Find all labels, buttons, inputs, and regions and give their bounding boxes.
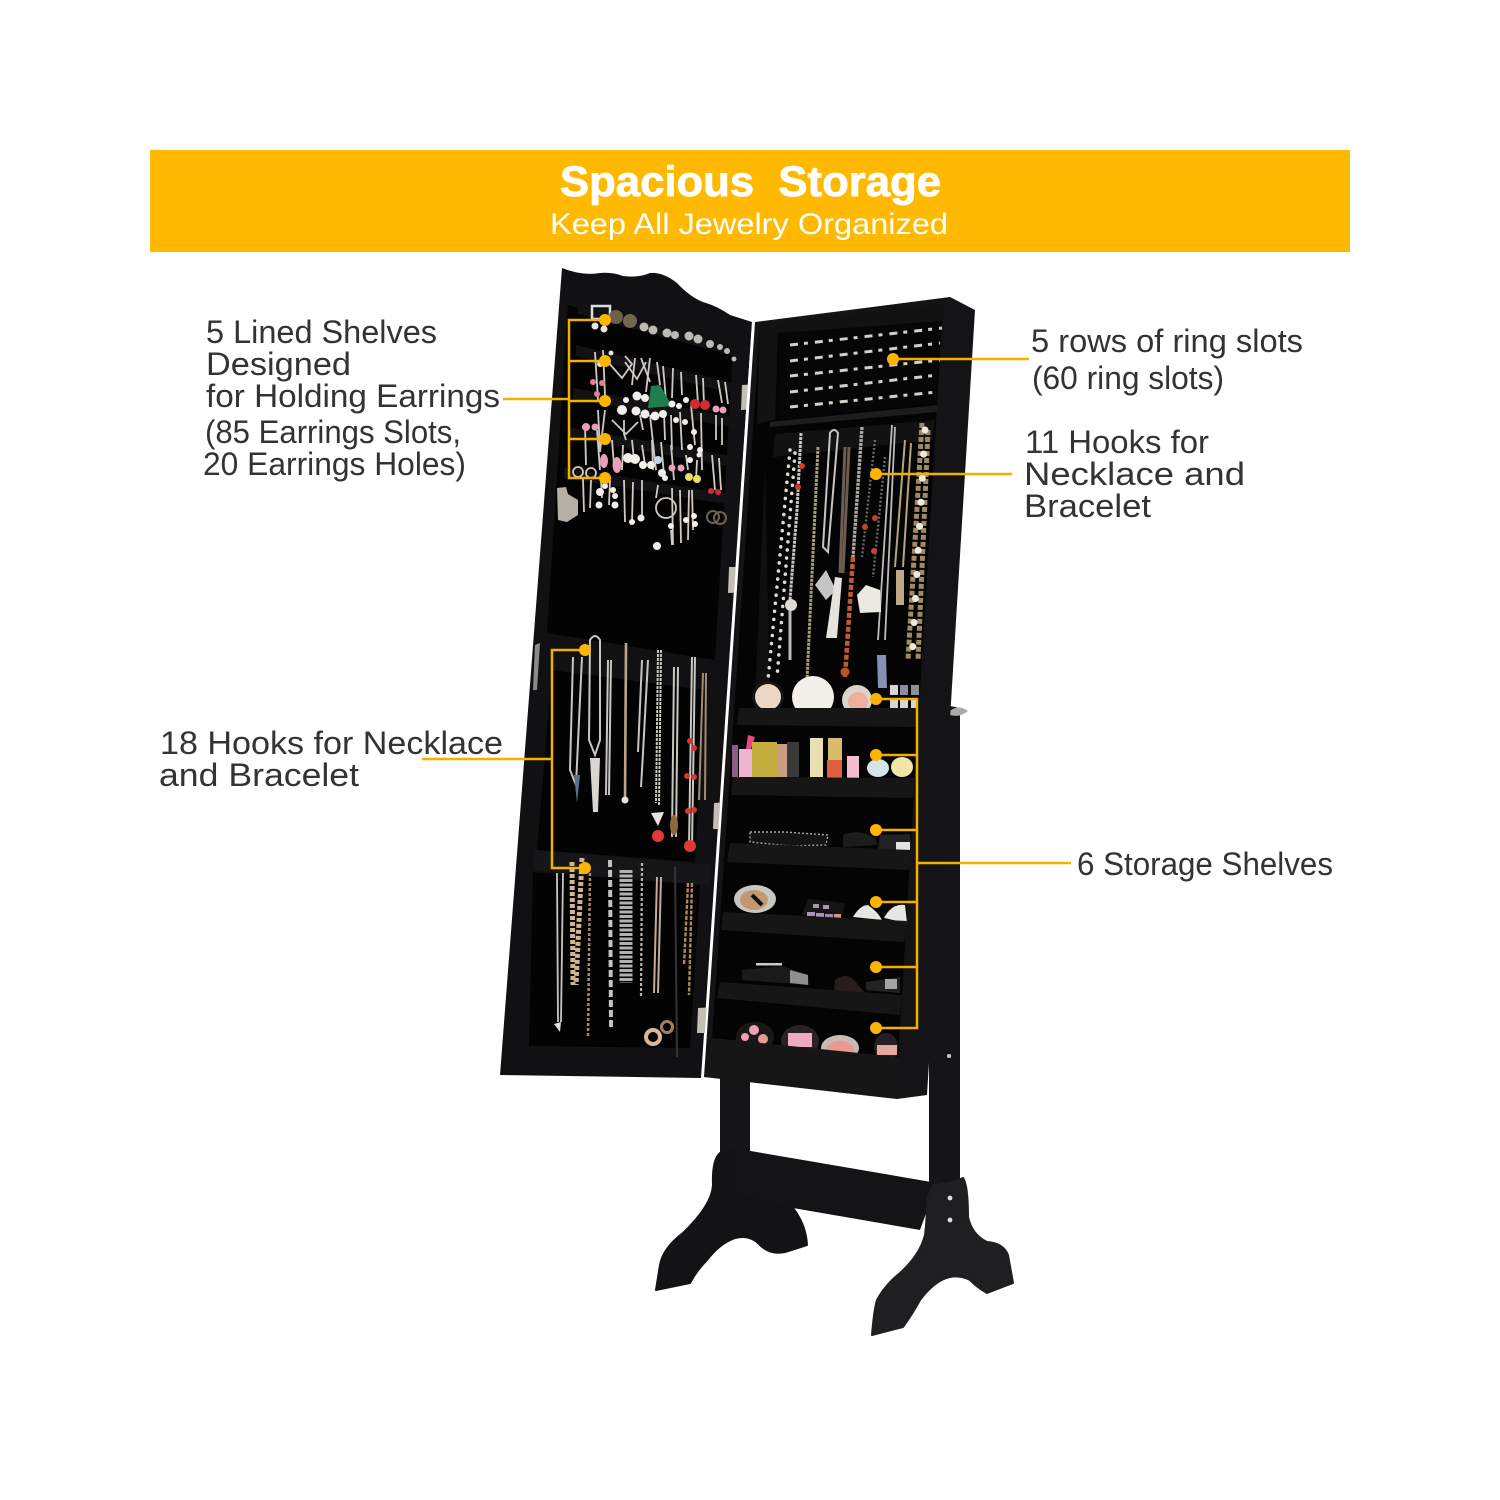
callout: earrings leader lines	[503, 314, 611, 484]
callout text: cabinet hooks: Necklace and	[1024, 456, 1245, 492]
callout: door hooks leader lines	[422, 644, 591, 874]
earring rails	[564, 303, 743, 505]
shelf 2 items	[732, 735, 913, 778]
shelf 5 sunglasses	[742, 963, 900, 993]
callout text: storage shelves: 6 Storage Shelves	[1077, 846, 1333, 882]
door upper velvet panel	[547, 305, 733, 660]
necklace hook rails	[551, 637, 727, 695]
door handle mark	[533, 643, 540, 690]
lock plate	[557, 487, 578, 522]
title: Spacious Storage	[560, 158, 941, 206]
subtitle: Keep All Jewelry Organized	[550, 208, 948, 241]
cabinet body	[704, 297, 975, 1099]
header banner	[150, 150, 1350, 252]
callout text: earrings: (85 Earrings Slots,	[205, 414, 461, 450]
floor stand	[656, 704, 1013, 1335]
shelf 3 sunglasses	[750, 832, 911, 850]
callout text: earrings: 20 Earrings Holes)	[203, 446, 466, 482]
shelf 1 items	[752, 676, 919, 718]
green tassel	[648, 385, 672, 408]
callout: cabinet hooks leader line	[870, 468, 1012, 480]
callout text: earrings	[203, 314, 500, 482]
callout text: door hooks	[159, 725, 503, 793]
callout: storage shelves leader lines	[870, 693, 1071, 1034]
callout text: ring slots: (60 ring slots)	[1032, 360, 1224, 396]
jewelry cabinet product	[159, 268, 1333, 1335]
necklaces on door, lower row	[557, 858, 692, 1057]
callout text: cabinet hooks	[1024, 424, 1245, 524]
shelf 4 items	[734, 885, 907, 923]
callout text: cabinet hooks: 11 Hooks for	[1025, 424, 1209, 460]
earrings	[573, 306, 736, 550]
necklaces on door, upper row	[570, 636, 706, 847]
necklaces on cabinet	[768, 423, 928, 680]
shelf 6 makeup	[736, 1022, 898, 1061]
door/cabinet gap	[702, 322, 755, 1077]
callout text: door hooks: and Bracelet	[159, 757, 359, 793]
callout text: door hooks: 18 Hooks for Necklace	[160, 725, 503, 761]
hinges	[697, 384, 760, 1033]
callout text: ring slots: 5 rows of ring slots	[1031, 323, 1303, 359]
door lower velvet panels	[537, 670, 705, 862]
callout text: earrings: 5 Lined Shelves	[206, 314, 437, 350]
necklace rail	[773, 420, 935, 457]
open door	[500, 268, 975, 1099]
ring tray	[770, 321, 942, 427]
callout text: earrings: Designed	[206, 346, 351, 382]
callout text: earrings: for Holding Earrings	[206, 378, 500, 414]
callout text: cabinet hooks: Bracelet	[1024, 488, 1151, 524]
callout: ring slots leader line	[887, 353, 1029, 365]
callout text: ring slots	[1031, 323, 1303, 396]
cabinet interior	[712, 305, 943, 1060]
cabinet pendants	[785, 463, 904, 688]
shelves	[705, 708, 917, 1098]
door pendants upper	[574, 738, 697, 852]
ring rows	[790, 328, 942, 407]
